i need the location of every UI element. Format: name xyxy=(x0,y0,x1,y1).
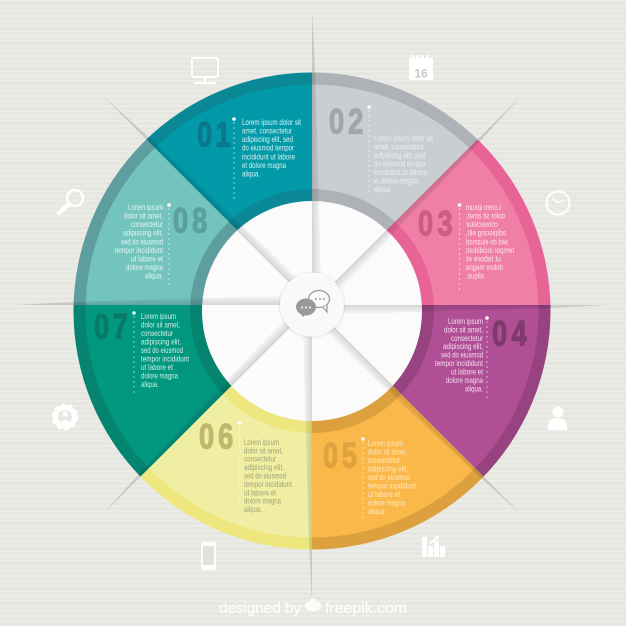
number 06: 06 xyxy=(199,417,233,456)
paragraph 07: dolore magna xyxy=(141,370,178,380)
paragraph 08: aliqua. xyxy=(145,271,163,281)
footer credit: freepik.com xyxy=(325,600,407,617)
paragraph 02: et dolore magna xyxy=(374,175,418,185)
paragraph 01: incididunt ut labore xyxy=(242,151,295,161)
paragraph 04: aliqua. xyxy=(465,384,483,394)
paragraph 02: do eiusmod tempor xyxy=(374,158,426,168)
paragraph 06: Lorem ipsum xyxy=(244,437,279,447)
paragraph 07: aliqua. xyxy=(141,379,159,389)
paragraph 03 mirrored: aliqua. xyxy=(466,271,484,281)
paragraph 03 mirrored: adipiscing elit, xyxy=(466,228,506,238)
paragraph 07: Lorem ipsum xyxy=(141,311,176,321)
text block 07 xyxy=(94,307,190,393)
segment 08 light teal xyxy=(74,140,289,305)
icon: magnifier xyxy=(59,190,83,213)
paragraph 02 xyxy=(374,133,434,194)
paragraph 08: Lorem ipsum xyxy=(128,202,163,212)
timeline 01 xyxy=(232,117,236,200)
icon: gear xyxy=(53,405,77,429)
text block 02 xyxy=(329,102,434,194)
icon: freepik logo xyxy=(304,598,322,611)
paragraph 04: ut labore et xyxy=(451,367,484,377)
paragraph 02: Lorem ipsum dolor sit xyxy=(374,133,434,143)
paragraph 02: amet, consectetur xyxy=(374,141,424,151)
timeline 05 xyxy=(361,437,365,522)
number 08: 08 xyxy=(173,201,207,240)
paragraph 08: ut labore et xyxy=(131,254,164,264)
paragraph 05: aliqua. xyxy=(368,506,386,516)
paragraph 03 mirrored: dolore magna xyxy=(466,262,503,272)
paragraph 01: do eiusmod tempor xyxy=(242,143,294,153)
footer credit xyxy=(219,598,407,617)
paragraph 06: sed do eiusmod xyxy=(244,470,286,480)
icon: smartphone xyxy=(201,542,216,570)
icon: clock xyxy=(546,192,570,214)
paragraph 03 mirrored: dolor sit amet, xyxy=(466,210,505,220)
paragraph 03 mirrored: sed do eiusmod xyxy=(466,236,508,246)
number 03: 03 xyxy=(418,204,453,243)
timeline 03 xyxy=(458,203,461,292)
paragraph 08: tempor incididunt xyxy=(115,245,164,255)
segment 03 pink xyxy=(335,140,550,305)
number 02: 02 xyxy=(329,102,363,141)
text block 08 xyxy=(115,201,207,287)
paragraph 05: sed do eiusmod xyxy=(368,472,410,482)
paragraph 01: et dolore magna xyxy=(242,160,286,170)
paragraph 08: dolore magna xyxy=(126,262,163,272)
paragraph 01: aliqua. xyxy=(242,168,260,178)
icon: monitor xyxy=(192,58,218,83)
paragraph 06: adipiscing elit, xyxy=(244,462,284,472)
paragraph 02: adipiscing elit, sed xyxy=(374,150,425,160)
icon: calendar xyxy=(409,55,433,80)
text block 03 xyxy=(418,202,514,292)
number 04: 04 xyxy=(492,314,527,353)
paragraph 07: sed do eiusmod xyxy=(141,345,183,355)
paragraph 03 mirrored: tempor incididunt xyxy=(465,245,514,255)
timeline 08 xyxy=(167,203,171,287)
paragraph 07 xyxy=(141,311,190,389)
paragraph 07: ut labore et xyxy=(141,362,174,372)
paragraph 03 mirrored: Lorem ipsum xyxy=(466,202,501,212)
text block 04 xyxy=(435,314,527,400)
timeline 04 xyxy=(485,316,489,400)
paragraph 04: consectetur xyxy=(451,333,483,343)
paragraph 05: Lorem ipsum xyxy=(368,438,403,448)
paragraph 01: amet, consectetur xyxy=(242,126,292,136)
paragraph 08 xyxy=(115,202,164,281)
text block 01 xyxy=(197,115,302,200)
icon: user xyxy=(548,406,567,430)
paragraph 07: dolor sit amet, xyxy=(141,319,180,329)
text block 06 xyxy=(199,417,293,514)
segment 02 grey xyxy=(312,72,478,282)
paragraph 08: consectetur xyxy=(131,219,163,229)
timeline 06 xyxy=(238,421,241,502)
icon: bar chart xyxy=(422,536,445,557)
segment 07 green xyxy=(74,305,290,476)
paragraph 07: consectetur xyxy=(141,328,173,338)
paragraph 08: adipiscing elit, xyxy=(123,228,163,238)
paragraph 04: dolor sit amet, xyxy=(444,324,483,334)
text block 05 xyxy=(323,436,417,522)
paragraph 02: aliqua. xyxy=(374,184,392,194)
paragraph 05: ut labore et xyxy=(368,489,401,499)
central hub with chat icon xyxy=(278,272,346,338)
segment 04 purple xyxy=(334,305,550,476)
number 07: 07 xyxy=(94,307,128,346)
footer credit: designed by xyxy=(219,600,301,617)
paragraph 04: tempor incididunt xyxy=(435,358,484,368)
paragraph 05 xyxy=(368,438,417,516)
paragraph 01: adipiscing elit, sed xyxy=(242,134,293,144)
paragraph 04: adipiscing elit, xyxy=(443,341,483,351)
segment 06 yellow xyxy=(140,328,312,550)
paragraph 01 xyxy=(242,117,302,178)
paragraph 05: tempor incididunt xyxy=(368,480,417,490)
paragraph 07: adipiscing elit, xyxy=(141,336,181,346)
paragraph 03 mirrored xyxy=(465,202,514,281)
paragraph 06: consectetur xyxy=(244,454,276,464)
paragraph 02: incididunt ut labore xyxy=(374,167,427,177)
paragraph 05: consectetur xyxy=(368,455,400,465)
segment 05 orange xyxy=(312,328,484,550)
segment 01 teal xyxy=(146,72,312,282)
paragraph 04: Lorem ipsum xyxy=(448,316,483,326)
paragraph 06 xyxy=(244,437,293,514)
paragraph 04: sed do eiusmod xyxy=(441,350,483,360)
icon: dark chat bubble xyxy=(296,298,316,317)
paragraph 05: dolore magna xyxy=(368,497,405,507)
paragraph 08: dolor sit amet, xyxy=(124,210,163,220)
paragraph 04: dolore magna xyxy=(446,375,483,385)
paragraph 03 mirrored: consectetur xyxy=(466,219,498,229)
paragraph 05: dolor sit amet, xyxy=(368,446,407,456)
paragraph 06: dolor sit amet, xyxy=(244,445,283,455)
number 01: 01 xyxy=(197,115,231,154)
icon: calendar: 16 xyxy=(414,66,428,80)
paragraph 04 xyxy=(435,316,484,394)
paragraph 08: sed do eiusmod xyxy=(121,236,163,246)
paragraph 01: Lorem ipsum dolor sit xyxy=(242,117,302,127)
paragraph 06: ut labore et xyxy=(244,487,277,497)
paragraph 06: tempor incididunt xyxy=(244,479,293,489)
paragraph 05: adipiscing elit, xyxy=(368,463,408,473)
timeline 02 xyxy=(367,105,371,192)
paragraph 07: tempor incididunt xyxy=(141,353,190,363)
paragraph 03 mirrored: ut labore et xyxy=(465,254,501,264)
paragraph 06: dolore magna xyxy=(244,496,281,506)
number 05: 05 xyxy=(323,436,357,475)
timeline 07 xyxy=(132,311,136,393)
paragraph 06: aliqua. xyxy=(244,504,262,514)
icon: light chat bubble xyxy=(308,290,330,312)
